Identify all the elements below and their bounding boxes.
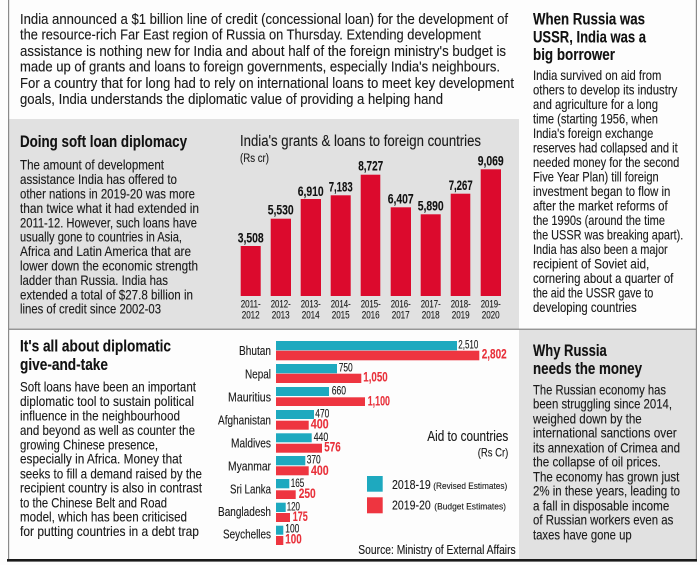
panel: intro: India announced a $1 billion line of credit (concessional loan) for the development of bbox=[20, 12, 509, 28]
country labels bbox=[218, 343, 272, 542]
bar values: 6,407 bbox=[388, 191, 414, 206]
heading: diplomatic give-and-take: give-and-take bbox=[20, 356, 108, 374]
red values bbox=[285, 347, 507, 547]
country labels: Afghanistan bbox=[218, 413, 271, 428]
text block: soft loan body: usually gone to countries in Asia, bbox=[20, 230, 182, 245]
year labels: 2013- bbox=[301, 298, 321, 310]
text block: soft loan body: lines of credit since 2002-03 bbox=[20, 302, 161, 317]
heading: when Russia was USSR bbox=[533, 11, 647, 64]
text block: why Russia body: The Russian economy has bbox=[533, 382, 666, 397]
bar values: 5,530 bbox=[268, 203, 294, 218]
panel: intro: For a country that for long had to rely on international loans to meet key development bbox=[20, 76, 514, 92]
year labels: 2012- bbox=[271, 298, 291, 310]
year labels: 2016- bbox=[391, 298, 411, 310]
panel: why Russia needs the money bbox=[519, 330, 696, 559]
text block: give-and-take body: for putting countries in a debt trap bbox=[20, 524, 199, 539]
teal values: 660 bbox=[332, 386, 346, 398]
country labels: Nepal bbox=[245, 366, 271, 381]
red values: 100 bbox=[285, 532, 302, 547]
heading: why Russia needs the money: Why Russia bbox=[533, 342, 607, 360]
text block: USSR body: and agriculture for a long bbox=[533, 97, 658, 112]
year labels: 2018- bbox=[451, 298, 471, 310]
year labels: 2019- bbox=[481, 298, 501, 310]
panel: doing soft loan diplomacy bbox=[9, 119, 519, 329]
panel: intro: made up of grants and loans to foreign governments, especially India's neighbours. bbox=[20, 60, 500, 76]
teal values bbox=[285, 339, 478, 535]
teal values: 370 bbox=[307, 455, 321, 467]
text block: soft loan body: assistance India has offered to bbox=[20, 172, 177, 187]
text block: USSR body: India's foreign exchange bbox=[533, 126, 653, 141]
text block: USSR body: investment began to flow in bbox=[533, 184, 670, 199]
year labels bbox=[241, 298, 501, 321]
text block: why Russia body bbox=[532, 382, 680, 542]
teal values: 120 bbox=[287, 501, 300, 513]
legend: 2018-19 bbox=[392, 477, 431, 492]
heading: diplomatic give-and-take bbox=[20, 338, 171, 374]
year labels: 2015- bbox=[361, 298, 381, 310]
panel: intro: assistance is nothing new for India and about half of the foreign ministry's budget is bbox=[20, 44, 506, 60]
teal values: 100 bbox=[285, 523, 299, 535]
text block: USSR body: cornering about a quarter of bbox=[533, 271, 673, 286]
panel: intro: goals, India understands the diplomatic value of providing a helping hand bbox=[20, 92, 443, 108]
horizontal bar chart: aid to countries bbox=[218, 339, 516, 557]
year labels: 2015 bbox=[332, 309, 350, 321]
red values: 175 bbox=[293, 509, 308, 524]
chart title: aid to countries bbox=[427, 429, 508, 460]
text block: why Russia body: weighed down by the bbox=[532, 411, 642, 426]
country labels: Maldives bbox=[231, 435, 271, 450]
chart unit: (Rs cr) bbox=[240, 153, 269, 165]
year labels: 2011- bbox=[241, 298, 261, 310]
bar values: 6,910 bbox=[298, 184, 324, 199]
text block: soft loan body: extended a total of $27.8 billion in bbox=[20, 287, 193, 302]
text block: why Russia body: been struggling since 2014, bbox=[533, 397, 672, 412]
text block: give-and-take body: to the Chinese Belt and Road bbox=[20, 495, 167, 510]
country labels: Mauritius bbox=[228, 389, 271, 404]
chart title: aid to countries: Aid to countries bbox=[427, 429, 508, 445]
country labels: Bangladesh bbox=[218, 504, 271, 519]
bar chart: grants and loans bbox=[238, 133, 504, 321]
year labels: 2017 bbox=[392, 309, 410, 321]
year labels: 2017- bbox=[421, 298, 441, 310]
heading: when Russia was USSR: When Russia was bbox=[533, 11, 645, 29]
text block: why Russia body: the collapse of oil prices. bbox=[533, 455, 661, 470]
red bars 2019-20 bbox=[276, 351, 479, 545]
teal bars 2018-19 bbox=[276, 341, 457, 535]
text block: give-and-take body: and beyond as well as counter the bbox=[20, 423, 195, 438]
teal values: 750 bbox=[339, 363, 353, 375]
bars bbox=[241, 169, 501, 296]
bar values: 8,727 bbox=[358, 159, 383, 174]
text block: give-and-take body bbox=[20, 380, 202, 539]
red values: 250 bbox=[299, 486, 316, 501]
bar values bbox=[238, 154, 504, 246]
text block: give-and-take body: seeks to fill a demand raised by the bbox=[20, 466, 202, 481]
year labels: 2018 bbox=[422, 309, 440, 321]
heading: doing soft loan diplomacy: Doing soft loan diplomacy bbox=[20, 133, 187, 151]
country labels: Bhutan bbox=[239, 343, 271, 358]
source: Source: Ministry of External Affairs bbox=[358, 543, 516, 557]
year labels: 2020 bbox=[482, 309, 500, 321]
bar values: 7,183 bbox=[329, 179, 353, 194]
text block: USSR body: recipient of Soviet aid, bbox=[533, 256, 649, 271]
text block: USSR body: developing countries bbox=[533, 300, 637, 315]
country labels: Myanmar bbox=[228, 458, 272, 473]
text block: give-and-take body: growing Chinese presence, bbox=[20, 437, 158, 452]
bar values: 3,508 bbox=[238, 231, 264, 246]
panel: intro bbox=[20, 12, 514, 108]
year labels: 2014- bbox=[331, 298, 351, 310]
chart title: India's grants & loans to foreign countries bbox=[240, 133, 481, 150]
text block: soft loan body: Africa and Latin America that are bbox=[20, 244, 191, 259]
legend bbox=[367, 476, 507, 513]
text block: why Russia body: international sanctions over bbox=[533, 426, 677, 441]
year labels: 2012 bbox=[242, 309, 260, 321]
text block: soft loan body: The amount of development bbox=[20, 157, 164, 172]
bar values: 9,069 bbox=[478, 154, 504, 169]
red values: 400 bbox=[311, 417, 329, 432]
teal values: 470 bbox=[315, 409, 329, 421]
text block: USSR body: Five Year Plan) till foreign bbox=[533, 170, 659, 185]
text block: give-and-take body: influence in the neighbourhood bbox=[20, 408, 180, 423]
heading: when Russia was USSR: USSR, India was a bbox=[533, 28, 647, 46]
text block: give-and-take body: especially in Africa. Money that bbox=[20, 452, 182, 467]
red values: 576 bbox=[324, 440, 341, 455]
country labels: Seychelles bbox=[223, 527, 271, 542]
panel: intro: the resource-rich Far East region of Russia on Thursday. Extending development bbox=[20, 28, 481, 44]
text block: soft loan body: other nations in 2019-20 was more bbox=[20, 186, 195, 201]
text block: give-and-take body: diplomatic tool to sustain political bbox=[20, 394, 194, 409]
text block: soft loan body bbox=[20, 157, 199, 317]
country labels: Sri Lanka bbox=[230, 481, 272, 496]
text block: why Russia body: a fall in disposable income bbox=[533, 498, 669, 513]
teal values: 440 bbox=[314, 432, 328, 444]
panel: diplomatic give-and-take bbox=[20, 338, 202, 539]
text block: soft loan body: lower down the economic strength bbox=[20, 259, 198, 274]
heading: diplomatic give-and-take: It's all about diplomatic bbox=[20, 338, 171, 356]
panel: when Russia was USSR bbox=[533, 11, 683, 315]
text block: soft loan body: ladder than Russia. India has bbox=[20, 273, 168, 288]
text block: USSR body: the aid the USSR gave to bbox=[533, 285, 653, 300]
text block: give-and-take body: recipient country is also in contrast bbox=[20, 481, 202, 496]
text block: USSR body: India survived on aid from bbox=[533, 68, 661, 83]
bar values: 5,890 bbox=[418, 198, 444, 213]
text block: give-and-take body: Soft loans have been an important bbox=[20, 380, 196, 395]
heading: when Russia was USSR: big borrower bbox=[533, 46, 616, 64]
year labels: 2014 bbox=[302, 309, 320, 321]
year labels: 2019 bbox=[452, 309, 470, 321]
text block: USSR body: time (starting 1956, when bbox=[533, 112, 658, 127]
red values: 1,050 bbox=[363, 370, 388, 385]
legend: (Revised Estimates) bbox=[433, 481, 507, 492]
heading: why Russia needs the money bbox=[533, 342, 642, 378]
text block: USSR body: India has also been a major bbox=[533, 242, 668, 257]
legend: (Budget Estimates) bbox=[434, 501, 506, 512]
heading: why Russia needs the money: needs the money bbox=[533, 360, 642, 378]
bar values: 7,267 bbox=[449, 178, 473, 193]
chart title: aid to countries: (Rs Cr) bbox=[478, 446, 508, 460]
text block: USSR body: after the market reforms of bbox=[533, 199, 668, 214]
red values: 1,100 bbox=[368, 394, 390, 409]
year labels: 2016 bbox=[362, 309, 380, 321]
text block: why Russia body: of Russian workers even as bbox=[533, 513, 673, 528]
legend: 2019-20 bbox=[392, 497, 431, 512]
text block: soft loan body: than twice what it had extended in bbox=[20, 201, 199, 216]
year labels: 2013 bbox=[272, 309, 290, 321]
text block: give-and-take body: model, which has been criticised bbox=[20, 510, 187, 525]
text block: USSR body: the 1990s (around the time bbox=[533, 213, 665, 228]
red values: 400 bbox=[311, 463, 329, 478]
red values: 2,802 bbox=[482, 347, 507, 362]
text block: soft loan body: 2011-12. However, such loans have bbox=[20, 215, 197, 230]
teal values: 165 bbox=[291, 478, 304, 490]
text block: USSR body bbox=[533, 68, 683, 315]
teal values: 2,510 bbox=[458, 339, 478, 351]
text block: why Russia body: taxes have gone up bbox=[533, 527, 632, 542]
